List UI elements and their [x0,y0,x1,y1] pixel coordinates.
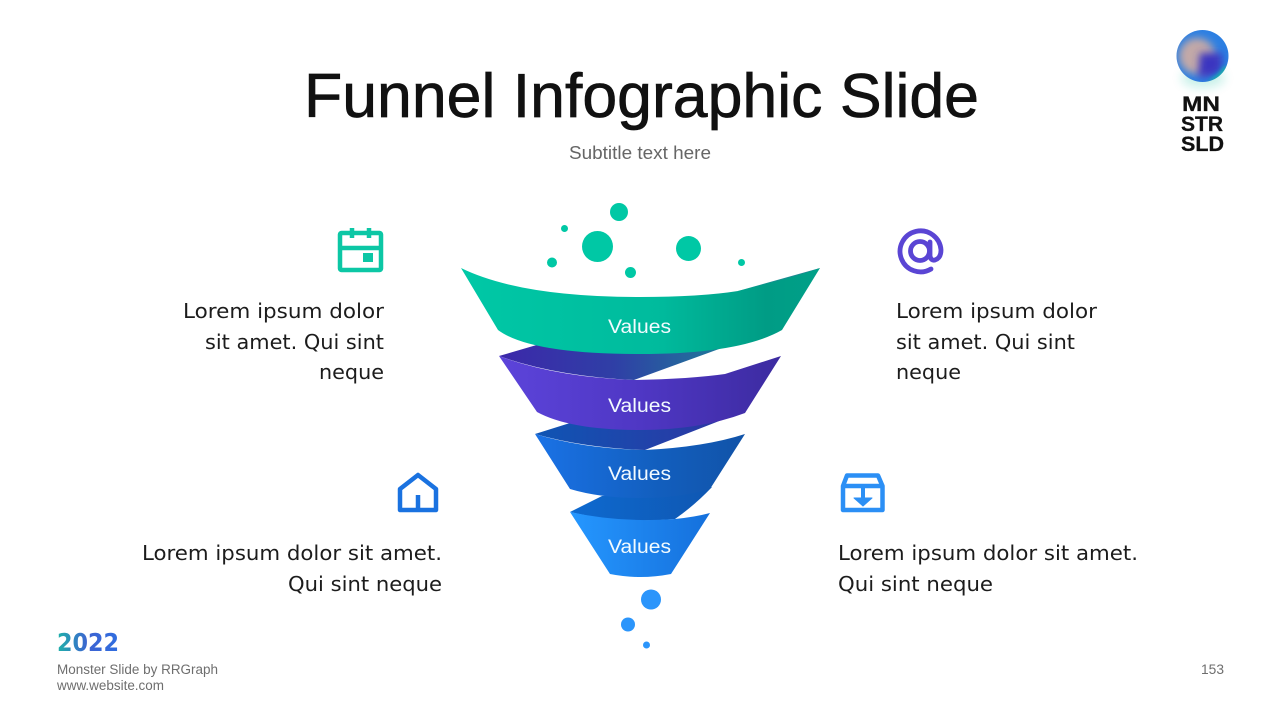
funnel [461,268,820,577]
text: bottom right [838,541,1138,596]
icon: at sign [900,231,941,272]
funnel layer 3: Values [608,464,671,485]
text: bottom left [142,541,442,596]
text: top left [183,299,385,384]
top bubbles [547,203,745,278]
funnel layer 4 [570,487,712,577]
text: bottom left: Qui sint neque [288,572,442,596]
funnel layer 3 [535,416,745,498]
logo text [1181,93,1224,156]
funnel layer 4: Values [608,537,671,558]
page number: 153 [1201,662,1224,677]
text: bottom right: Qui sint neque [838,572,993,596]
text: top left: sit amet. Qui sint [205,330,384,354]
title: Funnel Infographic Slide [304,62,979,131]
text: bottom right: Lorem ipsum dolor sit amet. [838,541,1138,565]
logo text: MN [1182,93,1220,116]
bottom bubbles [621,590,661,648]
funnel layer 2: Values [608,396,671,417]
logo sphere [1176,30,1232,88]
logo [1176,30,1232,156]
text: top right: neque [896,360,961,384]
footer credits [56,662,218,693]
text: top right: sit amet. Qui sint [896,330,1075,354]
footer credits: Monster Slide by RRGraph [57,662,218,677]
funnel layer 1: Values [608,317,671,338]
text: top right: Lorem ipsum dolor [896,299,1098,323]
funnel layer 1 [461,268,820,354]
funnel layer 2 [499,344,781,430]
icon: calendar [340,228,381,270]
subtitle: Subtitle text here [569,143,711,163]
year: 2022 [57,628,119,657]
text: top right [896,299,1098,384]
icon: inbox box [843,476,882,510]
logo text: STR [1181,113,1223,136]
text: bottom left: Lorem ipsum dolor sit amet. [142,541,442,565]
text: top left: Lorem ipsum dolor [183,299,385,323]
footer credits: www.website.com [56,678,164,693]
logo text: SLD [1181,133,1224,156]
icon: home [400,475,436,510]
text: top left: neque [319,360,384,384]
